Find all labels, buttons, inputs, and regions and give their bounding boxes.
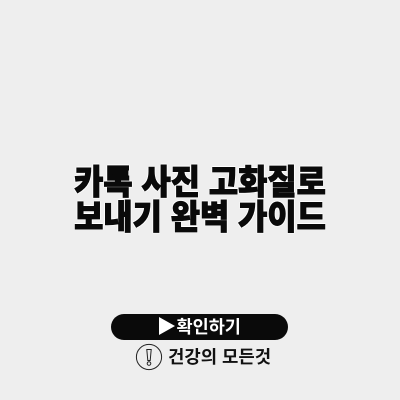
brand name: 건강의 모든것 [168,343,271,369]
title line 2: 보내기 완벽 가이드 [74,190,326,240]
button label: 확인하기 [176,314,241,339]
icon: exclamation circle [136,344,162,370]
icon: play triangle [159,317,175,335]
button: confirm [111,314,288,340]
title line 1: 카톡 사진 고화질로 [74,155,326,205]
brand row [136,343,271,370]
title [74,155,326,240]
